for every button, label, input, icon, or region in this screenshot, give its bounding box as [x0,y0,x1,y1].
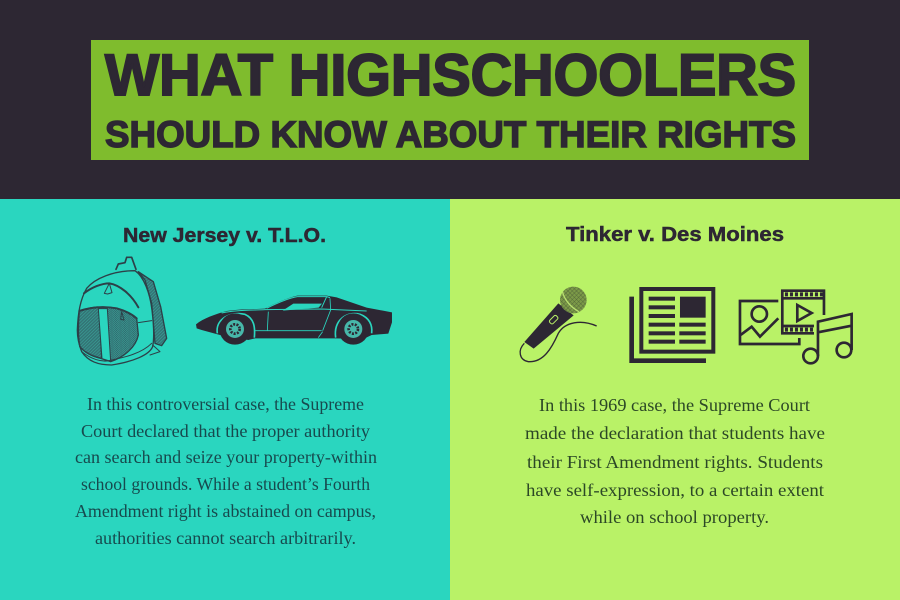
text block: T.L.O. summary: can search and seize your property-within [75,447,377,467]
icon: backpack [77,257,167,365]
text block: T.L.O. summary: In this controversial case, the Supreme [87,394,364,414]
text block: T.L.O. summary: school grounds. While a student’s Fourth [81,474,370,494]
title line 1: WHAT HIGHSCHOOLERS [105,43,796,108]
text block: Tinker summary: In this 1969 case, the Supreme Court [539,395,810,415]
title line 2: SHOULD KNOW ABOUT THEIR RIGHTS [105,113,796,155]
header band [0,0,900,199]
text block: Tinker summary: made the declaration that students have [525,423,825,443]
icon: media photo video music [740,291,852,363]
text block: Tinker summary: while on school property. [580,507,769,527]
heading: Tinker v. Des Moines: Tinker v. Des Moines [566,223,784,246]
panel: New Jersey v. T.L.O. [0,199,450,600]
panel: Tinker v. Des Moines [450,199,900,600]
text block: T.L.O. summary [75,394,377,548]
title banner [91,40,809,160]
text block: Tinker summary [525,395,825,527]
text block: T.L.O. summary: Amendment right is abstained on campus, [75,501,376,521]
text block: T.L.O. summary: Court declared that the proper authority [81,421,370,441]
text block: T.L.O. summary: authorities cannot search arbitrarily. [95,528,356,548]
text block: Tinker summary: have self-expression, to a certain extent [526,480,824,500]
icon: sports car [196,296,392,345]
heading: New Jersey v. T.L.O.: New Jersey v. T.L.O. [123,224,326,247]
icon: newspaper [632,289,713,361]
icon: microphone [520,287,597,362]
text block: Tinker summary: their First Amendment rights. Students [527,452,823,472]
